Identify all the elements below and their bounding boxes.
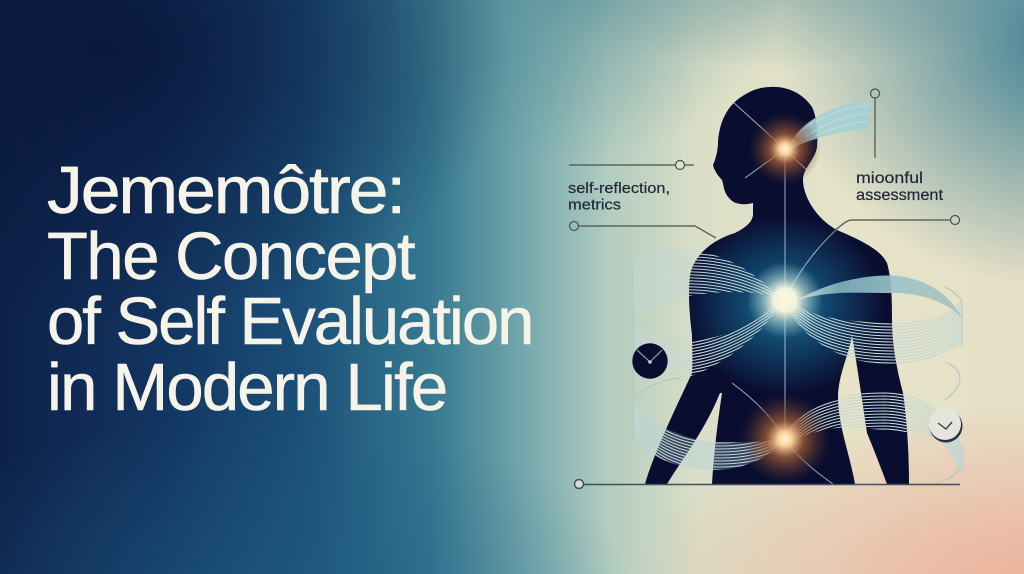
callout: mindful label: mioonful [856, 170, 923, 187]
icon: check badge [929, 408, 962, 442]
callout: mindful label: assessment [856, 187, 944, 204]
callout: assessment line [832, 216, 960, 233]
callout: self-reflection line [569, 160, 694, 170]
title: The Concept [47, 218, 414, 294]
title: in Modern Life [47, 350, 446, 424]
title [47, 153, 532, 424]
callout: self-reflection label: self-reflection, [568, 180, 670, 197]
callout: metrics line [570, 222, 716, 238]
icon: clock [632, 343, 668, 379]
glow: hip [740, 394, 830, 484]
top teal ribbon [798, 276, 962, 318]
band: upper left back [633, 249, 774, 315]
callout: head line [870, 89, 880, 158]
band: lower left [634, 406, 778, 470]
figure diagram [568, 86, 962, 490]
title: of Self Evaluation [47, 284, 532, 359]
baseline axis [574, 480, 960, 488]
head ribbon [788, 100, 872, 150]
band: lower right [788, 392, 962, 475]
body axis lines [732, 102, 850, 484]
band fills [634, 405, 785, 470]
title: Jememôtre: [47, 153, 404, 228]
band: front right [790, 300, 962, 364]
silhouette [645, 87, 909, 484]
band: front left [635, 305, 776, 377]
ring outlines [633, 262, 962, 484]
ribbon bands [630, 233, 962, 490]
callout: self-reflection label: metrics [568, 196, 621, 214]
glow: head [749, 113, 821, 185]
glow: chest [747, 262, 823, 338]
